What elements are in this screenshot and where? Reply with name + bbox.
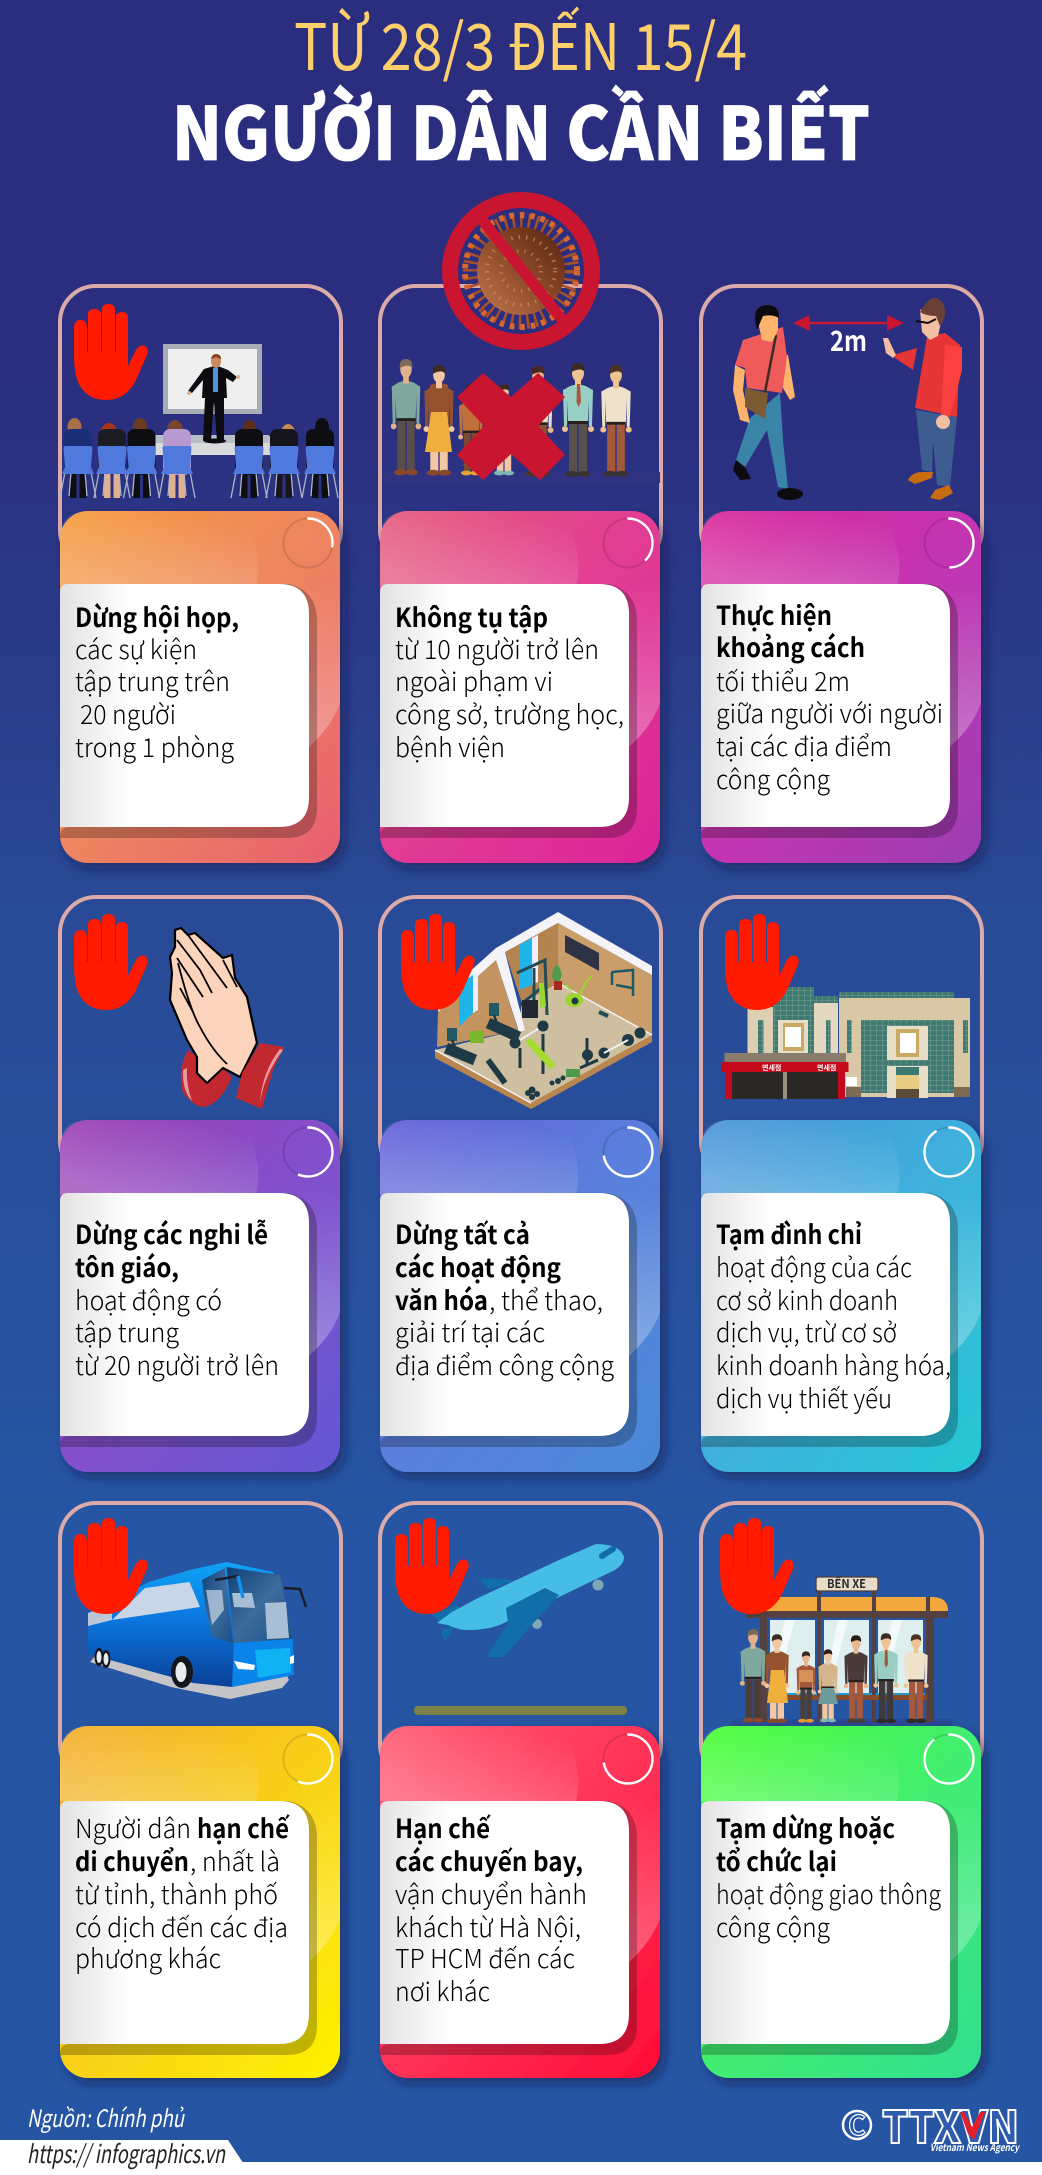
text block: stop cultural activities: , thể thao, <box>489 1281 603 1318</box>
illustration: two people keeping 2m distance <box>733 298 962 500</box>
illustration: duty free building: 면세점 <box>762 1063 781 1073</box>
text block: suspend public transport: Tạm dừng hoặc <box>716 1809 895 1846</box>
text block: suspend businesses: cơ sở kinh doanh <box>716 1281 898 1318</box>
text block: limit travel: phương khác <box>75 1939 221 1976</box>
text block: stop cultural activities: văn hóa <box>395 1281 488 1318</box>
logo: TTXVN: TTXVN <box>882 2092 1019 2156</box>
text block: keep distance: tại các địa điểm <box>716 727 892 764</box>
label: 2m: 2m <box>830 320 867 360</box>
text block: stop religious ceremonies: Dừng các nghi lễ <box>75 1215 268 1252</box>
text block: keep distance: Thực hiện <box>716 596 832 633</box>
text block: no gatherings <box>395 598 624 765</box>
text block: limit travel: từ tỉnh, thành phố <box>75 1875 278 1912</box>
title <box>172 0 870 182</box>
text block: no gatherings: công sở, trường học, <box>395 695 624 732</box>
text block: limit flights: khách từ Hà Nội, <box>395 1908 581 1945</box>
text block: suspend public transport <box>716 1809 941 1945</box>
arrow: distance <box>793 315 904 331</box>
text block: stop meetings <box>75 598 239 765</box>
text block: stop religious ceremonies: tập trung <box>75 1313 179 1350</box>
icon: stop hand <box>395 1518 469 1614</box>
text block: no gatherings: từ 10 người trở lên <box>395 630 599 667</box>
text block: suspend businesses: Tạm đình chỉ <box>716 1215 862 1252</box>
text block: keep distance: khoảng cách <box>716 628 865 665</box>
panel: row 3 column 1 <box>60 1726 340 2078</box>
text block: keep distance: tối thiểu 2m <box>716 662 850 699</box>
illustration: airplane <box>414 1544 627 1715</box>
text block: limit travel: , nhất là <box>190 1842 280 1879</box>
icon: red cross <box>457 373 565 480</box>
panel: row 2 column 3 <box>701 1120 981 1472</box>
text block: stop cultural activities: Dừng tất cả <box>395 1215 530 1252</box>
text block: suspend businesses: dịch vụ, trừ cơ sở <box>716 1313 897 1350</box>
text block: limit flights: các chuyến bay, <box>395 1842 583 1879</box>
text block: stop cultural activities <box>395 1215 614 1383</box>
logo: TTXVN: C <box>848 2104 866 2143</box>
icon: stop hand <box>401 914 475 1010</box>
text block: keep distance: giữa người với người <box>716 694 943 731</box>
icon: stop hand <box>74 914 148 1010</box>
illustration: crowd with red cross <box>382 359 660 483</box>
text block: suspend businesses: hoạt động của các <box>716 1248 912 1285</box>
text block: stop religious ceremonies: từ 20 người trở lên <box>75 1346 279 1383</box>
text block: keep distance: công cộng <box>716 760 830 797</box>
footer tab with website: https:// infographics.vn <box>27 2135 226 2171</box>
text block: limit travel <box>75 1809 290 1976</box>
illustration: praying hands <box>170 928 284 1109</box>
text block: suspend public transport: hoạt động giao thông <box>716 1875 941 1912</box>
text block: limit travel: Người dân <box>75 1809 191 1846</box>
title line 2: NGƯỜI DÂN CẦN BIẾT <box>172 76 870 182</box>
illustration: bus stop with waiting people <box>732 1575 952 1726</box>
illustration: duty free building <box>721 987 970 1099</box>
panel: row 3 column 2 <box>380 1726 660 2078</box>
text block: suspend public transport: công cộng <box>716 1908 830 1945</box>
text block: limit flights: TP HCM đến các <box>395 1939 575 1976</box>
text block: stop meetings: trong 1 phòng <box>75 728 234 765</box>
text block: stop meetings: 20 người <box>80 695 176 732</box>
text block: stop religious ceremonies <box>75 1215 279 1383</box>
text block: suspend businesses <box>716 1215 951 1416</box>
text block: limit travel: di chuyển <box>75 1842 189 1879</box>
text block: stop religious ceremonies: tôn giáo, <box>75 1248 179 1285</box>
panel: row 2 column 1 <box>60 1120 340 1472</box>
text block: limit flights: vận chuyển hành <box>395 1875 587 1912</box>
icon: virus with prohibition sign <box>450 200 592 342</box>
label: bus station sign: BẾN XE <box>827 1575 866 1592</box>
icon: stop hand <box>74 1518 148 1614</box>
icon: stop hand <box>74 304 148 400</box>
text block: stop meetings: các sự kiện <box>75 630 197 667</box>
text block: stop meetings: tập trung trên <box>75 662 230 699</box>
text block: stop religious ceremonies: hoạt động có <box>75 1281 222 1318</box>
footer tab with website <box>0 2135 1042 2175</box>
text block: suspend public transport: tổ chức lại <box>716 1842 837 1879</box>
text block: limit flights <box>395 1809 587 2009</box>
text block: no gatherings: bệnh viện <box>395 728 505 765</box>
text block: stop cultural activities: giải trí tại các <box>395 1313 545 1350</box>
text block: stop cultural activities: địa điểm công cộng <box>395 1346 614 1383</box>
illustration: duty free building: 면세점 <box>817 1063 836 1073</box>
text block: limit travel: hạn chế <box>197 1809 290 1846</box>
text block: suspend businesses: dịch vụ thiết yếu <box>716 1379 892 1416</box>
panel: row 3 column 3 <box>701 1726 981 2078</box>
panel: row 1 column 1 <box>60 511 340 863</box>
source note: Nguồn: Chính phủ <box>27 2099 185 2134</box>
icon: stop hand <box>725 914 799 1010</box>
text block: suspend businesses: kinh doanh hàng hóa, <box>716 1346 951 1383</box>
panel: row 1 column 3 <box>701 511 981 863</box>
text block: limit flights: Hạn chế <box>395 1809 491 1846</box>
text block: limit travel: có dịch đến các địa <box>75 1908 288 1945</box>
icon: stop hand <box>720 1518 794 1614</box>
illustration: gym room <box>435 912 652 1109</box>
text block: stop cultural activities: các hoạt động <box>395 1248 561 1285</box>
outlines of illustration frames <box>60 286 982 1780</box>
illustration: meeting with presenter and audience <box>60 344 338 498</box>
text block: no gatherings: ngoài phạm vi <box>395 662 553 699</box>
ground bar <box>414 1706 627 1715</box>
text block: stop meetings: Dừng hội họp, <box>75 598 239 635</box>
panel: row 2 column 2 <box>380 1120 660 1472</box>
logo: TTXVN: Vietnam News Agency <box>930 2139 1021 2154</box>
panel: row 1 column 2 <box>380 511 660 863</box>
text block: keep distance <box>716 596 943 797</box>
text block: limit flights: nơi khác <box>395 1972 490 2009</box>
illustration: coach bus <box>88 1562 306 1699</box>
text block: no gatherings: Không tụ tập <box>395 598 548 635</box>
